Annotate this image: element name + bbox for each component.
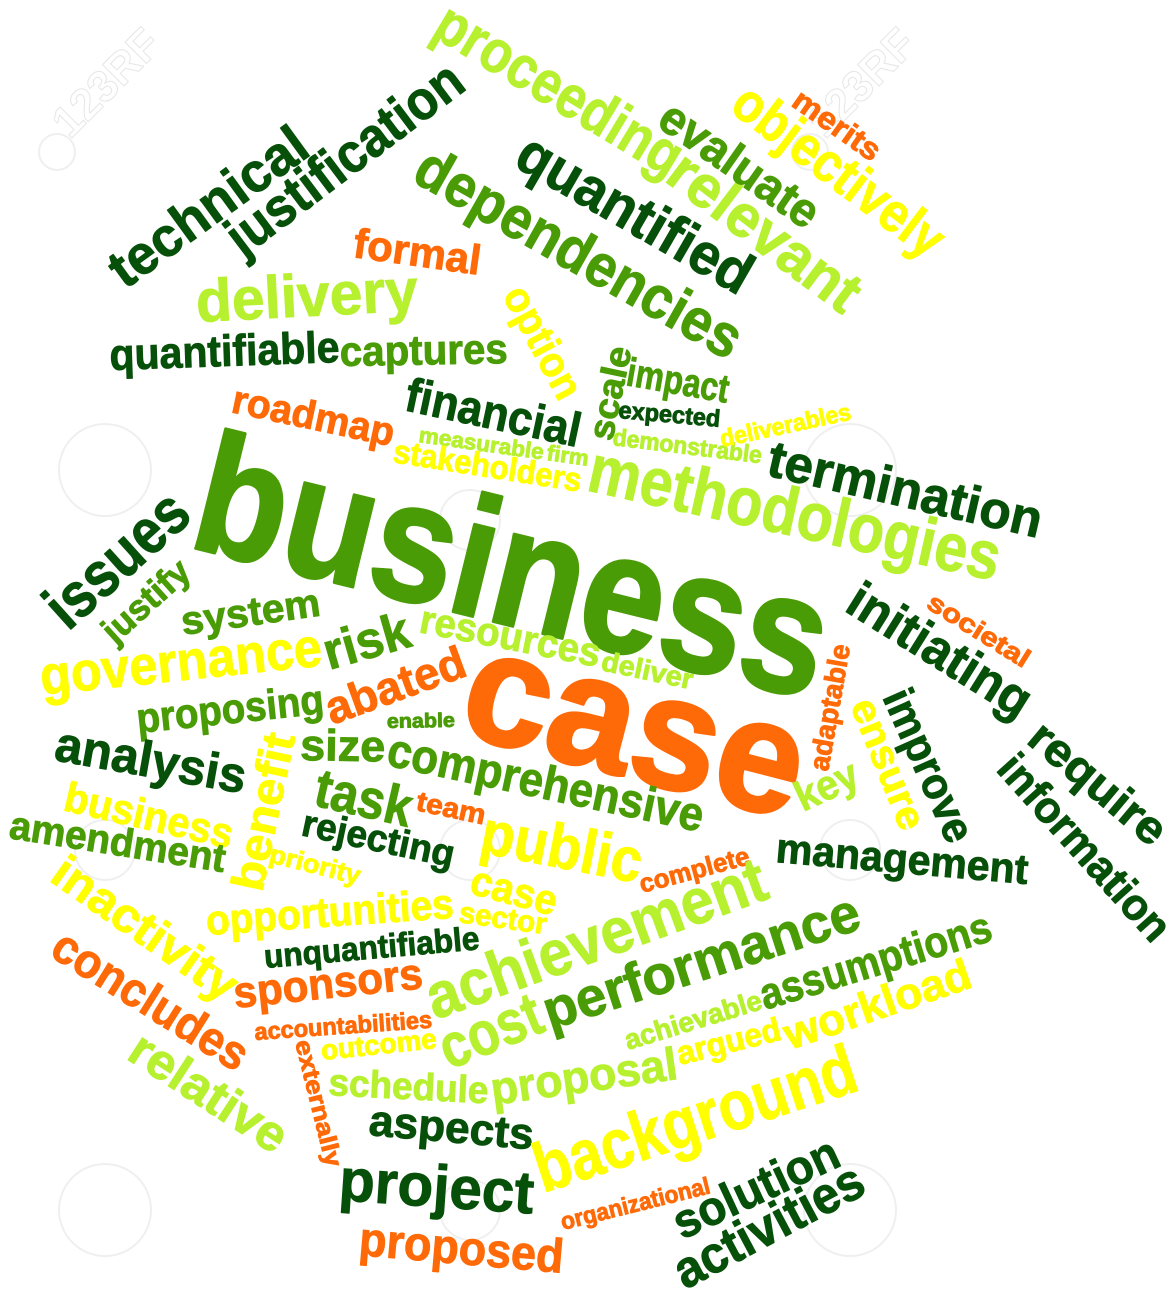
word: background: background [524, 1030, 866, 1207]
word: relevant: relevant [655, 137, 875, 326]
word: abated: abated [318, 636, 473, 734]
word: analysis: analysis [51, 716, 251, 804]
word: complete: complete [636, 841, 753, 899]
word: justification: justification [212, 48, 475, 268]
word: assumptions: assumptions [754, 903, 997, 1020]
word: business small: business [60, 773, 238, 857]
word: argued: argued [673, 1010, 785, 1072]
word: demonstrable: demonstrable [611, 424, 763, 469]
word: unquantifiable: unquantifiable [262, 919, 481, 975]
word: solution: solution [664, 1127, 848, 1250]
word: dependencies: dependencies [404, 133, 755, 372]
word: aspects: aspects [367, 1096, 536, 1159]
word: case: case [446, 593, 826, 853]
word: key: key [787, 750, 866, 820]
word: governance: governance [37, 616, 325, 707]
word: concludes: concludes [42, 919, 259, 1082]
word: methodologies: methodologies [582, 430, 1008, 596]
word: activities: activities [663, 1152, 874, 1300]
word: public: public [475, 798, 648, 897]
word: issues: issues [29, 475, 204, 642]
watermark 123RF right: 123RF [797, 19, 925, 147]
word: proposing: proposing [134, 676, 326, 742]
word: option: option [494, 277, 593, 407]
word: organizational: organizational [558, 1173, 713, 1236]
word: evaluate: evaluate [649, 91, 830, 240]
word: deliverables: deliverables [718, 399, 853, 453]
word: performance: performance [535, 880, 868, 1041]
word: formal: formal [351, 219, 484, 284]
word: achievable: achievable [621, 985, 766, 1056]
word: workload: workload [776, 950, 978, 1060]
word: enable: enable [387, 710, 455, 733]
word: objectively: objectively [721, 70, 958, 270]
word: require: require [1019, 710, 1169, 856]
word: amendment: amendment [7, 803, 229, 881]
word: scale: scale [580, 342, 640, 444]
word: system: system [178, 581, 323, 644]
word: adaptable: adaptable [803, 642, 856, 773]
word: sponsors: sponsors [231, 949, 425, 1018]
word: project: project [337, 1146, 536, 1227]
word: schedule: schedule [328, 1062, 490, 1112]
word: financial: financial [401, 369, 586, 458]
word: quantifiable: quantifiable [109, 323, 340, 380]
word: risk: risk [316, 602, 417, 682]
word: societal: societal [922, 587, 1036, 674]
word: comprehensive: comprehensive [383, 724, 709, 843]
word: roadmap: roadmap [228, 378, 399, 455]
watermark stamps [39, 134, 896, 1256]
word: inactivity: inactivity [42, 846, 248, 1013]
word: sector: sector [457, 896, 549, 941]
word: rejecting: rejecting [298, 803, 458, 876]
word: team: team [414, 786, 489, 830]
word: justify: justify [92, 550, 198, 652]
word: opportunities: opportunities [204, 880, 455, 944]
watermark 123RF left: 123RF [42, 19, 170, 147]
word: task: task [309, 756, 419, 839]
word: delivery: delivery [194, 256, 420, 335]
word: accountabilities: accountabilities [254, 1007, 433, 1046]
word: externally: externally [289, 1037, 347, 1170]
word: outcome: outcome [319, 1023, 438, 1066]
word: priority: priority [267, 839, 365, 890]
word: captures: captures [339, 325, 508, 375]
word: size: size [300, 721, 386, 771]
word: case small: case [466, 856, 563, 924]
word: impact: impact [623, 351, 733, 412]
word: relative: relative [119, 1020, 299, 1164]
word: cost: cost [428, 979, 553, 1083]
word: expected: expected [617, 397, 721, 433]
word: quantified: quantified [506, 120, 765, 307]
word: improve: improve [873, 681, 984, 850]
word: proposal: proposal [487, 1037, 681, 1115]
word: management: management [774, 824, 1030, 893]
word: resources: resources [416, 598, 604, 676]
word: business: business [177, 397, 849, 736]
word: proposed: proposed [357, 1213, 566, 1284]
word: benefit: benefit [221, 728, 305, 895]
word: deliver: deliver [599, 646, 696, 695]
word: termination: termination [762, 430, 1048, 550]
word: ensure: ensure [842, 692, 934, 836]
word: stakeholders: stakeholders [391, 432, 584, 499]
word: technical: technical [96, 113, 320, 300]
word: merits: merits [786, 82, 888, 168]
word: measurable: measurable [417, 422, 546, 464]
word: initiating: initiating [837, 571, 1043, 730]
word: achievement: achievement [415, 843, 776, 1033]
word: firm: firm [545, 440, 590, 471]
